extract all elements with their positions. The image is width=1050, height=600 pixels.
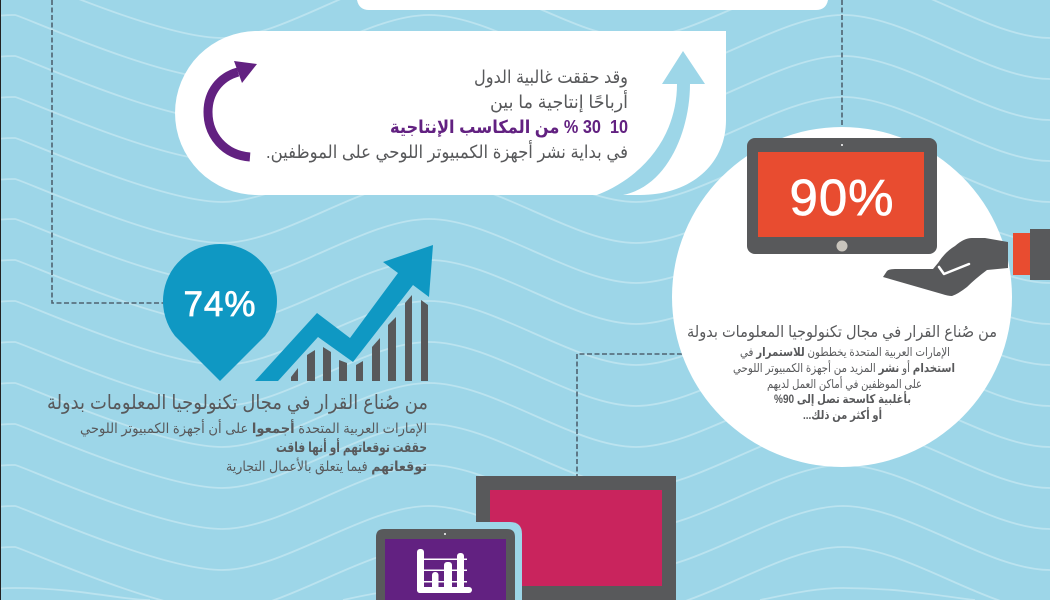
circle text: أو أكثر من ذلك... — [803, 407, 882, 423]
callout text: وقد حققت غالبية الدول — [474, 67, 628, 88]
statistic text: الإمارات العربية المتحدة أجمعوا على أن أجهزة الكمبيوتر اللوحي — [80, 419, 427, 437]
statistic text: من صُناع القرار في مجال تكنولوجيا المعلومات بدولة — [47, 392, 428, 415]
panel: top white box — [357, 0, 828, 10]
icon: bar chart glyph — [417, 549, 472, 593]
circle text: من صُناع القرار في مجال تكنولوجيا المعلومات بدولة — [687, 324, 997, 342]
icon: large pink tablet — [476, 476, 676, 600]
circle text: الإمارات العربية المتحدة يخططون للاستمرار في — [740, 345, 950, 360]
statistic text: توقعاتهم فيما يتعلق بالأعمال التجارية — [226, 457, 427, 475]
circle text: استخدام أو نشر المزيد من أجهزة الكمبيوتر اللوحي — [733, 360, 955, 376]
circle text — [687, 324, 997, 423]
icon: small purple tablet — [376, 522, 522, 600]
icon: tablet showing 90%: 90% — [789, 169, 895, 226]
icon: map pin with 74% — [163, 244, 277, 381]
chart: rising arrow with bars — [255, 245, 433, 381]
white circle — [672, 127, 1012, 467]
icon: purple curved arrow — [208, 61, 257, 157]
icon: tablet showing 90% — [747, 138, 937, 254]
callout text: أرباحًا إنتاجية ما بين — [490, 90, 628, 113]
callout text: في بداية نشر أجهزة الكمبيوتر اللوحي على الموظفين. — [266, 140, 628, 163]
callout text — [266, 67, 628, 163]
icon: hand holding tablet — [883, 229, 1050, 296]
panel: productivity callout — [175, 31, 726, 195]
circle text: على الموظفين في أماكن العمل لديهم — [767, 376, 922, 392]
icon: light blue rising arrow — [597, 51, 705, 195]
callout bubble — [175, 31, 726, 195]
callout text: 10 30 % من المكاسب الإنتاجية — [390, 117, 628, 138]
panel: 74% statistic — [47, 244, 433, 475]
statistic text — [47, 392, 428, 475]
circle text: بأغلبية كاسحة تصل إلى 90% — [774, 391, 911, 406]
icon: map pin with 74%: 74% — [183, 285, 257, 324]
statistic text: حققت توقعاتهم أو أنها فاقت — [276, 438, 427, 456]
panel: 90% circle — [672, 127, 1050, 467]
